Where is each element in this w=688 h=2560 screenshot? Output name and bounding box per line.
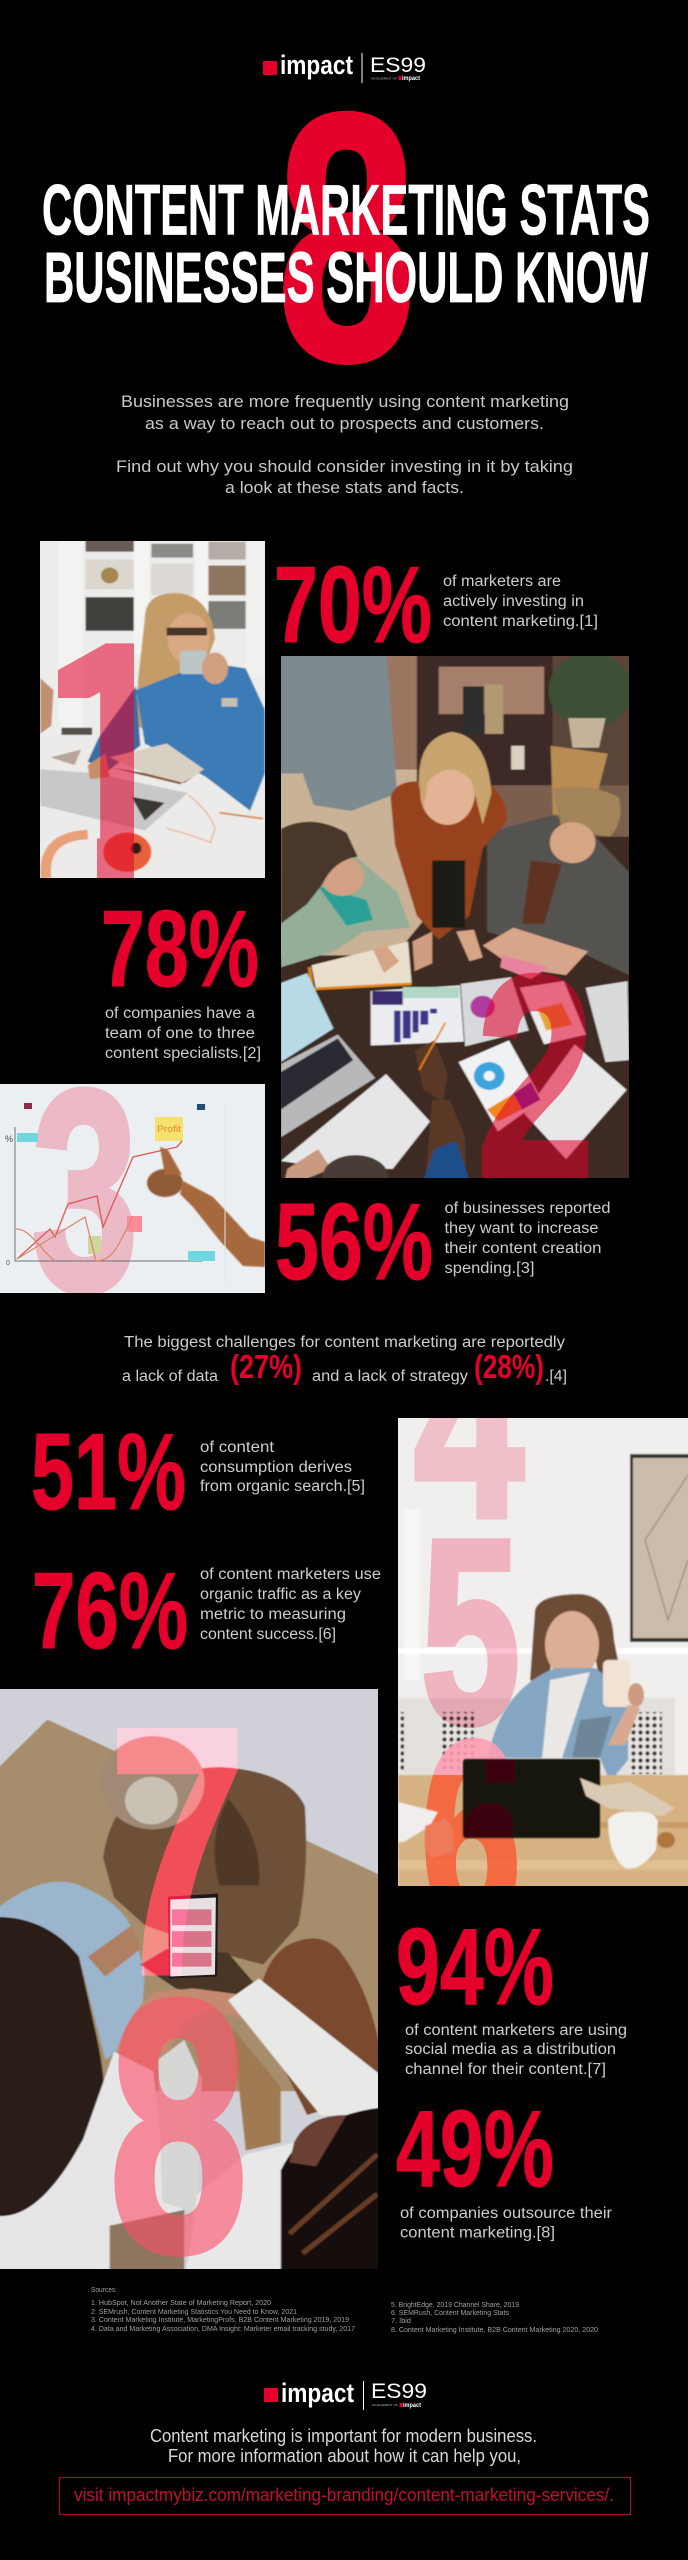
stat: 76%: of content marketers use <box>200 1566 381 1583</box>
numeral 3 overlay: 3 <box>32 1032 138 1350</box>
challenges callout: (27%) <box>230 1348 302 1385</box>
stat: 56%: they want to increase <box>444 1220 598 1237</box>
photo 3: chart on whiteboard with numeral 3: Profit <box>157 1124 182 1134</box>
stat: 56%: spending.[3] <box>444 1260 534 1277</box>
stat: 94%: 94% <box>396 1906 554 2028</box>
stat: 76%: 76% <box>32 1550 188 1672</box>
intro text: Businesses are more frequently using content marketing <box>121 393 569 411</box>
sources: 6. SEMRush, Content Marketing Stats <box>391 2308 509 2317</box>
intro text: a look at these stats and facts. <box>225 479 464 497</box>
intro text: as a way to reach out to prospects and customers. <box>145 415 544 433</box>
numeral 1 overlay: 1 <box>14 575 229 947</box>
stat: 56% <box>275 1181 610 1303</box>
photo 5: people looking at phone with numerals 7 8 <box>0 1656 395 2326</box>
stat: 56%: 56% <box>275 1181 433 1303</box>
sources: 4. Data and Marketing Association, DMA Insight: Marketer email tracking study, 2017 <box>91 2324 355 2333</box>
stat: 76%: content success.[6] <box>200 1626 336 1643</box>
stat: 94%: channel for their content.[7] <box>405 2061 606 2078</box>
stat: 51%: from organic search.[5] <box>200 1478 365 1495</box>
sources: 2. SEMrush, Content Marketing Statistics You Need to Know, 2021 <box>91 2307 297 2316</box>
stat: 70%: content marketing.[1] <box>443 613 598 630</box>
stat: 78%: team of one to three <box>105 1025 255 1042</box>
stat: 70% <box>274 544 598 666</box>
logo: impact ES99 header: AN ELEMENT OF <box>371 76 397 80</box>
sources: 5. BrightEdge, 2019 Channel Share, 2019 <box>391 2300 519 2309</box>
photo 2: team around table with numeral 2 <box>263 639 649 1237</box>
intro text: Find out why you should consider investing in it by taking <box>116 458 573 476</box>
stat: 49%: 49% <box>396 2088 554 2210</box>
sources: Sources: <box>91 2285 117 2294</box>
logo: impact ES99 footer: impact <box>281 2378 354 2408</box>
logo: impact ES99 footer: impact <box>403 2402 422 2409</box>
challenges callout <box>122 1334 567 1385</box>
stat: 70%: of marketers are <box>443 573 561 590</box>
challenges callout: and a lack of strategy <box>312 1368 468 1385</box>
stat: 51%: consumption derives <box>200 1459 352 1476</box>
photo 4: woman with mug at laptop with numerals 4 5 6 <box>370 1273 688 1981</box>
logo: impact ES99 footer: AN ELEMENT OF <box>372 2403 398 2407</box>
stat: 78% <box>101 888 261 1062</box>
stat: 76%: metric to measuring <box>200 1606 346 1623</box>
stat: 76%: organic traffic as a key <box>200 1586 361 1603</box>
logo: impact ES99 header <box>263 50 426 83</box>
sources: 7. Ibid <box>391 2316 411 2325</box>
stat: 49%: of companies outsource their <box>400 2205 612 2222</box>
photo 3: chart on whiteboard with numeral 3: 0 <box>6 1260 10 1267</box>
logo: impact ES99 footer <box>264 2378 427 2410</box>
stat: 78%: 78% <box>101 888 259 1010</box>
sources <box>91 2285 598 2334</box>
logo: impact ES99 header: ES99 <box>370 54 426 77</box>
intro text <box>116 393 573 497</box>
big red numeral 8 behind title: 8 <box>277 40 416 434</box>
stat: 78%: content specialists.[2] <box>105 1045 261 1062</box>
closing text: Content marketing is important for modern business. <box>150 2426 537 2446</box>
numeral 6 overlay: 6 <box>421 1687 521 1981</box>
challenges callout: .[4] <box>545 1368 567 1385</box>
photo 3: chart on whiteboard with numeral 3: % <box>5 1134 13 1144</box>
numeral 4 overlay: 4 <box>414 1273 525 1574</box>
stat: 94%: of content marketers are using <box>405 2022 627 2039</box>
numeral 5 overlay: 5 <box>421 1485 520 1778</box>
logo: impact ES99 footer: ES99 <box>371 2380 427 2403</box>
call to action box <box>60 2478 630 2514</box>
stat: 51% <box>31 1411 365 1533</box>
sources: 1. HubSpot, Not Another State of Marketing Report, 2020 <box>91 2298 271 2307</box>
challenges callout: The biggest challenges for content marketing are reportedly <box>124 1334 565 1351</box>
stat: 70%: actively investing in <box>443 593 584 610</box>
challenges callout: a lack of data <box>122 1368 218 1385</box>
stat: 76% <box>32 1550 381 1672</box>
call to action box: visit impactmybiz.com/marketing-branding/content-marketing-services/. <box>74 2485 614 2505</box>
stat: 56%: their content creation <box>444 1240 602 1257</box>
challenges callout: (28%) <box>474 1348 544 1385</box>
stat: 78%: of companies have a <box>105 1005 255 1022</box>
closing text <box>150 2426 537 2466</box>
closing text: For more information about how it can help you, <box>168 2446 521 2466</box>
stat: 94% <box>396 1906 627 2078</box>
photo 1: woman drinking at desk with numeral 1 <box>40 541 265 878</box>
stat: 51%: 51% <box>31 1411 186 1533</box>
stat: 56%: of businesses reported <box>444 1200 610 1217</box>
logo: impact ES99 header: impact <box>402 75 421 82</box>
stat: 49%: content marketing.[8] <box>400 2224 555 2242</box>
sources: 8. Content Marketing Institute, B2B Content Marketing 2020, 2020 <box>391 2325 598 2334</box>
stat: 70%: 70% <box>274 544 432 666</box>
photo 3: chart on whiteboard with numeral 3 <box>0 1032 265 1350</box>
logo: impact ES99 header: impact <box>280 50 353 80</box>
title <box>42 172 650 318</box>
stat: 94%: social media as a distribution <box>405 2041 616 2058</box>
stat: 51%: of content <box>200 1439 275 1456</box>
sources: 3. Content Marketing Institute, MarketingProfs, B2B Content Marketing 2019, 2019 <box>91 2315 349 2324</box>
